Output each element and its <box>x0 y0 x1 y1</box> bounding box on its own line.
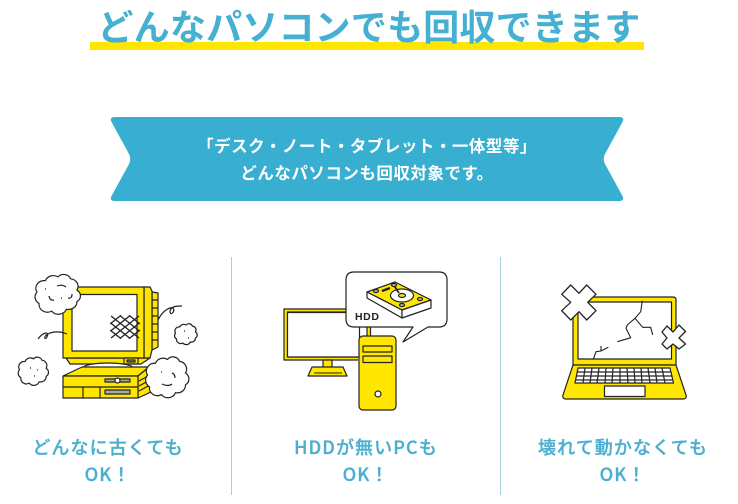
label: broken: 壊れて動かなくても <box>538 434 708 460</box>
icon: desktop pc with hdd bubble <box>284 272 447 410</box>
label: broken <box>538 434 708 487</box>
icon: broken laptop <box>562 285 686 399</box>
crack mesh <box>110 315 140 339</box>
title underline <box>90 42 644 50</box>
banner text: どんなパソコンも回収対象です。 <box>240 160 494 184</box>
divider left <box>231 257 232 495</box>
label: no hdd: HDDが無いPCも <box>294 434 438 460</box>
touchpad <box>604 386 645 396</box>
label: broken: OK！ <box>600 461 646 487</box>
tape x large <box>562 285 596 320</box>
label: no hdd <box>294 434 438 487</box>
title: どんなパソコンでも回収できます <box>97 0 640 51</box>
banner text <box>197 133 537 184</box>
hdd label: HDD <box>355 311 380 323</box>
speech bubble <box>346 272 447 342</box>
banner <box>110 117 624 201</box>
divider right <box>500 257 501 495</box>
label: old pc <box>32 434 184 487</box>
icon: old dusty computer <box>18 274 197 398</box>
tower <box>359 336 396 410</box>
label: old pc: どんなに古くても <box>32 434 184 460</box>
monitor <box>284 309 358 360</box>
keyboard <box>575 368 674 383</box>
label: no hdd: OK！ <box>343 461 389 487</box>
dust clouds <box>35 274 80 314</box>
label: old pc: OK！ <box>85 461 131 487</box>
hdd <box>367 282 431 310</box>
banner text: 「デスク・ノート・タブレット・一体型等」 <box>197 133 537 157</box>
tape x small <box>662 325 686 349</box>
screen cracks <box>617 301 653 342</box>
